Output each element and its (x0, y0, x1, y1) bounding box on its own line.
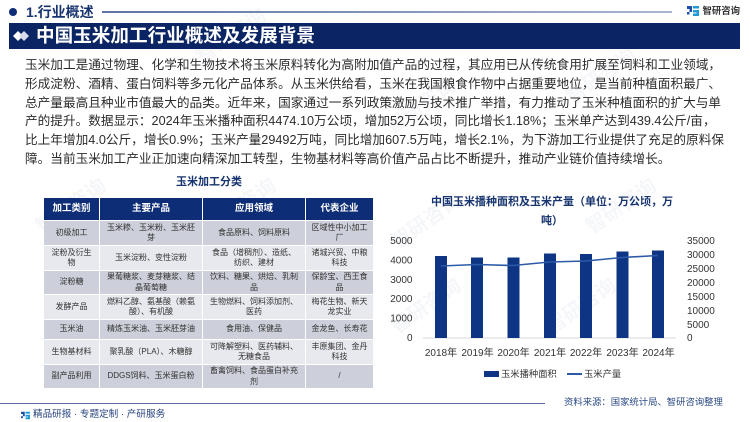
right axis labels: 35000 (687, 236, 715, 247)
year labels: 2020年 (497, 346, 530, 359)
table: corn processing categories: 食品原料、饲料原料 (218, 228, 290, 237)
table: corn processing categories: 区域性中小加工厂 (312, 222, 368, 242)
intro paragraph: 产的提升。数据显示：2024年玉米播种面积4474.10万公顷，增加52万公顷，同比增长1.18%；玉米单产达到439.4公斤/亩， (25, 114, 716, 128)
header rule (102, 10, 672, 12)
icon: small logo (21, 412, 30, 420)
intro paragraph: 比上年增加4.0公斤，增长0.9%；玉米产量29492万吨，同比增加607.5万吨，增长2.1%，为下游加工行业提供了充足的原料保 (25, 133, 724, 147)
legend: planting area: 玉米播种面积 (501, 369, 557, 379)
right axis labels (687, 236, 715, 344)
watermarks: 智研咨询 (382, 75, 461, 139)
right axis labels: 0 (687, 333, 693, 344)
bars: planting area (435, 250, 664, 338)
watermarks: 智研咨询 (387, 190, 466, 254)
table: corn processing categories: 畜禽饲料、食品蛋白补充剂 (210, 366, 298, 386)
chart legend (484, 369, 621, 379)
title: 中国玉米加工行业概述及发展背景 (36, 25, 315, 46)
table: corn processing categories: 主要产品 (132, 203, 170, 214)
intro paragraph: 玉米加工是通过物理、化学和生物技术将玉米原料转化为高附加值产品的过程，其应用已从传统食用扩展至饲料和工业领域， (25, 58, 721, 72)
table: corn processing categories (44, 198, 373, 388)
icon: diamonds (13, 31, 29, 41)
watermarks: 智研咨询 (542, 275, 621, 339)
left axis labels (390, 236, 413, 344)
left axis labels: 5000 (390, 236, 413, 247)
chart title: 中国玉米播种面积及玉米产量（单位：万公顷，万吨） (431, 196, 673, 226)
right axis labels: 15000 (687, 292, 715, 303)
year labels: 2018年 (425, 346, 457, 359)
title banner (9, 23, 740, 49)
intro paragraph: 总产量最高且种业市值最大的品类。近年来，国家通过一系列政策激励与技术推广举措，有力推动了玉米种植面积的扩大与单 (25, 96, 721, 110)
table: corn processing categories: 金龙鱼、长寿花 (312, 324, 368, 333)
left axis labels: 4000 (390, 256, 413, 266)
line: corn output (441, 256, 658, 266)
right axis labels: 30000 (687, 250, 715, 261)
table: corn processing categories: 加工类别 (52, 203, 90, 214)
table: corn processing categories: 淀粉糖 (60, 277, 84, 286)
year labels: 2021年 (534, 346, 566, 359)
year labels: 2019年 (461, 346, 494, 359)
logo: 智研咨询 (702, 5, 740, 16)
x axis (423, 337, 676, 339)
year labels: 2023年 (606, 346, 639, 359)
right axis labels: 5000 (687, 320, 710, 331)
table: corn processing categories: 梅花生物、新天龙实业 (312, 296, 368, 316)
right axis labels: 20000 (687, 278, 715, 289)
legend: corn output: 玉米产量 (584, 369, 621, 379)
watermarks: 智研咨询 (202, 175, 281, 239)
table: corn processing categories: 应用领域 (235, 203, 273, 214)
year labels: 2024年 (642, 346, 675, 359)
table: corn processing categories: DDGS饲料、玉米蛋白粉 (107, 371, 195, 380)
table: corn processing categories: 聚乳酸（PLA）、木糖醇 (109, 347, 193, 356)
year labels: 2022年 (570, 346, 602, 359)
table: corn processing categories: 纺织、建材 (234, 258, 274, 267)
left axis labels: 2000 (390, 294, 413, 305)
year labels (425, 346, 675, 359)
combo chart (390, 236, 715, 359)
source note: 资料来源：国家统计局、智研咨询整理 (564, 397, 723, 407)
table: corn processing categories: 燃料乙醇、氨基酸（赖氨酸）、有机酸 (107, 296, 195, 316)
section heading: 1.行业概述 (26, 4, 94, 20)
left axis labels: 1000 (390, 314, 413, 324)
table: corn processing categories: / (338, 371, 341, 380)
watermarks: 智研咨询 (582, 175, 661, 239)
table: corn processing categories: 玉米糁、玉米粉、玉米胚芽 (107, 222, 195, 242)
icon: logo mark (687, 6, 699, 16)
intro paragraph (25, 58, 724, 166)
watermarks: 智研咨询 (192, 5, 271, 69)
intro paragraph: 障。当前玉米加工产业正加速向精深加工转型，生物基材料等高价值产品占比不断提升，推动产业链价值持续增长。 (25, 152, 670, 166)
table: corn processing categories: 副产品利用 (52, 371, 92, 380)
table: corn processing categories: 初级加工 (56, 228, 88, 237)
table: corn processing categories: 食用油、保健品 (226, 324, 282, 333)
left axis labels: 3000 (390, 275, 413, 286)
left axis labels: 0 (407, 333, 413, 344)
table: corn processing categories: 食品（增稠剂）、造纸、 (212, 248, 296, 256)
watermarks: 智研咨询 (562, 45, 641, 109)
table: corn processing categories: 代表企业 (320, 203, 358, 214)
table: corn processing categories: 丰原集团、金丹科技 (312, 342, 368, 361)
table: corn processing categories: 诸城兴贸、中粮科技 (312, 248, 368, 267)
table: corn processing categories: 玉米油 (60, 324, 84, 333)
table: corn processing categories: 果葡糖浆、麦芽糖浆、结晶葡萄糖 (107, 272, 195, 292)
table: corn processing categories: 发酵产品 (56, 302, 88, 311)
footer rule (0, 402, 545, 404)
table: corn processing categories: 精炼玉米油、玉米胚芽油 (107, 324, 195, 333)
table: corn processing categories: 可降解塑料、医药辅料、无糖食品 (210, 342, 298, 361)
right axis labels: 10000 (687, 306, 715, 317)
table: corn processing categories: 淀粉及衍生物 (52, 248, 92, 267)
table: corn processing categories: 生物基材料 (52, 347, 92, 356)
watermarks: 智研咨询 (32, 175, 111, 239)
watermarks: 智研咨询 (387, 275, 466, 339)
intro paragraph: 形成淀粉、酒精、蛋白饲料等多元化产品体系。从玉米供给看，玉米在我国粮食作物中占据重要地位，是当前种植面积最广、 (25, 77, 721, 91)
table: corn processing categories: 生物燃料、饲料添加剂、医药 (210, 296, 298, 316)
table: corn processing categories: 保龄宝、西王食品 (312, 272, 368, 292)
right axis labels: 25000 (687, 264, 715, 275)
footer tagline: 精品研报 · 专题定制 · 产研服务 (33, 409, 165, 420)
table: corn processing categories: 玉米淀粉、变性淀粉 (115, 253, 187, 262)
table heading: 玉米加工分类 (176, 176, 242, 188)
table: corn processing categories: 饮料、糖果、烘焙、乳制品 (210, 272, 298, 292)
